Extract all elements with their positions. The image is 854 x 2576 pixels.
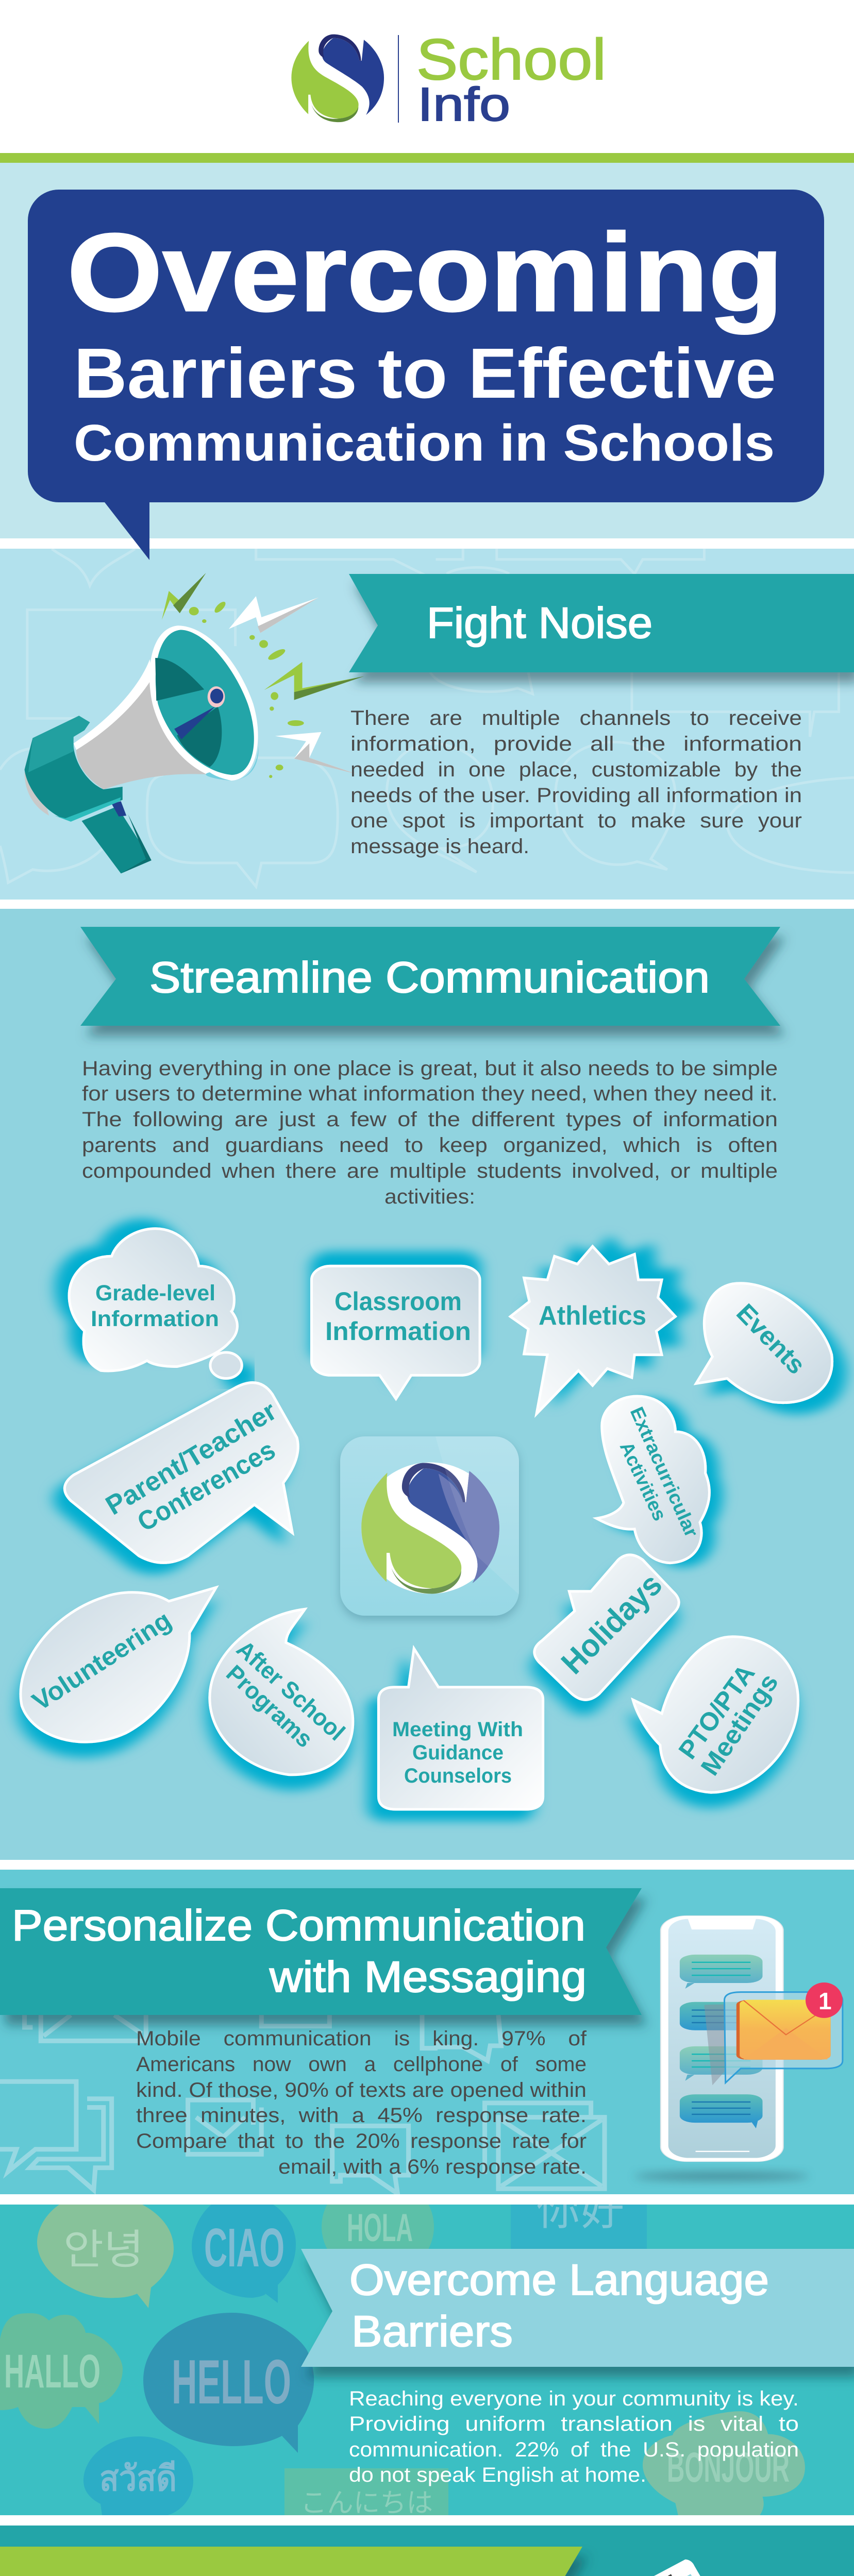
text: streamline body: The following are just a few of the different types of information bbox=[82, 1108, 778, 1131]
text: personalize body: Compare that to the 20% response rate for bbox=[136, 2130, 587, 2153]
logo wordmark: Info: Info bbox=[417, 78, 510, 131]
notification badge circle bbox=[806, 1982, 843, 2018]
panel: title background bbox=[0, 163, 854, 538]
bubble: Thai greeting: สวัสดี bbox=[99, 2459, 177, 2498]
chat bubble 1 bbox=[680, 1955, 763, 1989]
icon: app icon with S mark bbox=[340, 1436, 519, 1620]
bubble: Chinese greeting bbox=[511, 2205, 647, 2249]
bubble: Grade-level Information: Information bbox=[91, 1307, 219, 1331]
bubble: Parent/Teacher Conferences bbox=[64, 1383, 298, 1563]
bubble: Korean greeting bbox=[37, 2205, 174, 2308]
bubble: Grade-level Information: Grade-level bbox=[95, 1281, 215, 1306]
text: streamline body: compounded when there are multiple students involved, or multiple bbox=[82, 1160, 778, 1182]
bubble: Athletics bbox=[510, 1246, 675, 1414]
bubble: Extracurricular Activities bbox=[596, 1396, 709, 1563]
text: personalize body: email, with a 6% response rate. bbox=[278, 2156, 587, 2178]
logo wordmark: School: School bbox=[416, 27, 606, 92]
bubble: PTO/PTA Meetings: PTO/PTA bbox=[673, 1659, 761, 1764]
banner: Overcome Language Barriers bbox=[301, 2249, 854, 2367]
bubble: After School Programs: After School bbox=[231, 1635, 350, 1745]
text: fight noise body: information, provide all the information bbox=[350, 733, 802, 755]
megaphone rim bbox=[149, 625, 258, 781]
bubble: Volunteering: Volunteering bbox=[27, 1605, 176, 1716]
heading: Streamline Communication: Streamline Communication bbox=[149, 953, 710, 1002]
text: fight noise body: one spot is important to make sure your bbox=[350, 809, 802, 832]
panel: simplify administration bbox=[0, 2526, 854, 2576]
bubble: Grade-level Information bbox=[69, 1229, 242, 1379]
text: personalize body: kind. Of those, 90% of texts are opened within bbox=[136, 2079, 587, 2102]
bubble: Events bbox=[696, 1283, 832, 1403]
bubble: HELLO: HELLO bbox=[172, 2347, 291, 2417]
banner: Overcome Language Barriers: Barriers bbox=[351, 2307, 513, 2355]
text: streamline body bbox=[82, 1057, 778, 1208]
bubble: Meeting With Guidance Counselors: Guidance bbox=[412, 1741, 504, 1764]
bubble: HALLO: HALLO bbox=[4, 2345, 101, 2398]
bubble: Chinese greeting: 你好 bbox=[537, 2185, 624, 2234]
bubble: Holidays bbox=[534, 1555, 679, 1700]
text: personalize body: three minutes, with a 45% response rate. bbox=[136, 2104, 587, 2127]
bubble: Events: Events bbox=[731, 1298, 811, 1380]
bubble: Holidays: Holidays bbox=[555, 1567, 669, 1681]
text: streamline body: parents and guardians need to keep organized, which is often bbox=[82, 1134, 778, 1157]
greeting speech bubbles bbox=[0, 2175, 805, 2518]
panel: title callout bbox=[28, 190, 824, 560]
text: language body: do not speak English at home. bbox=[349, 2464, 646, 2486]
bubble: HOLA: HOLA bbox=[347, 2206, 413, 2250]
banner: Fight Noise bbox=[349, 574, 854, 672]
text: streamline body: Having everything in one place is great, but it also needs to be simple bbox=[82, 1057, 778, 1080]
text: language body: Reaching everyone in your community is key. bbox=[349, 2387, 799, 2410]
bubble: Parent/Teacher Conferences: Conferences bbox=[132, 1435, 280, 1537]
icon: hand holding smartphone bbox=[615, 2560, 854, 2576]
bubble: CIAO: CIAO bbox=[204, 2217, 284, 2278]
text: personalize body: Americans now own a cellphone of some bbox=[136, 2053, 587, 2076]
bubble: After School Programs bbox=[210, 1609, 353, 1775]
title line: Overcoming: Overcoming bbox=[67, 210, 783, 334]
bubble: BONJOUR bbox=[643, 2411, 805, 2515]
heading: Personalize Communication with Messaging: Personalize Communication bbox=[12, 1901, 585, 1950]
title line: Communication in Schools: Communication in Schools bbox=[74, 414, 775, 472]
chat bubble 2 bbox=[680, 2002, 763, 2030]
banner: Personalize Communication with Messaging bbox=[0, 1888, 642, 2015]
logo bbox=[291, 27, 606, 131]
bubble: Japanese greeting bbox=[284, 2468, 448, 2518]
bubble: PTO/PTA Meetings: Meetings bbox=[695, 1668, 784, 1781]
phone body bbox=[615, 2560, 755, 2576]
megaphone handle bbox=[82, 806, 152, 873]
megaphone cone bbox=[76, 659, 215, 789]
sound bolts and sparks bbox=[162, 573, 206, 620]
banner: Simplify Administration bbox=[0, 2547, 582, 2576]
text: fight noise body: needs of the user. Providing all information in bbox=[350, 784, 802, 807]
bubble: CIAO bbox=[192, 2205, 296, 2303]
bubble: Classroom Information: Classroom bbox=[334, 1287, 462, 1316]
text: personalize body bbox=[136, 2027, 587, 2178]
text: fight noise body: message is heard. bbox=[350, 835, 529, 858]
bubble: After School Programs: Programs bbox=[221, 1659, 318, 1753]
bubble: Korean greeting: 안녕 bbox=[63, 2227, 144, 2273]
title line: Barriers to Effective: Barriers to Effective bbox=[74, 334, 776, 413]
bubble: HOLA bbox=[322, 2205, 434, 2249]
green divider bar bbox=[0, 153, 854, 163]
banner: Personalize Communication with Messaging: with Messaging bbox=[269, 1953, 587, 2001]
bubble: Classroom Information bbox=[311, 1266, 480, 1399]
text: language body: Providing uniform translation is vital to bbox=[349, 2413, 799, 2435]
panel: fight noise bbox=[0, 541, 854, 900]
icon: School Info S mark bbox=[291, 34, 384, 122]
envelope on glass card bbox=[725, 1992, 843, 2083]
notification badge number: 1 bbox=[818, 1988, 832, 2014]
bubble: Meeting With Guidance Counselors bbox=[378, 1649, 543, 1809]
bubble: Volunteering bbox=[21, 1587, 216, 1742]
bubble: HELLO bbox=[143, 2313, 314, 2453]
bubble: PTO/PTA Meetings bbox=[633, 1637, 798, 1792]
bubble: Thai greeting bbox=[83, 2436, 193, 2515]
chat bubble 3 bbox=[680, 2046, 763, 2081]
bubble: Meeting With Guidance Counselors: Meeting With bbox=[392, 1718, 523, 1741]
text: fight noise body: needed in one place, customizable by the bbox=[350, 758, 802, 781]
bubble: Extracurricular Activities: Activities bbox=[616, 1438, 671, 1524]
heading: Fight Noise: Fight Noise bbox=[427, 599, 652, 647]
icon: megaphone bbox=[25, 573, 364, 873]
bubble: HALLO bbox=[0, 2313, 123, 2429]
text: language body: communication. 22% of the U.S. population bbox=[349, 2438, 799, 2461]
bubble: Japanese greeting: こんにちは bbox=[300, 2488, 433, 2518]
text: streamline body: activities: bbox=[384, 1185, 475, 1208]
text: streamline body: for users to determine what information they need, when they need it. bbox=[82, 1082, 778, 1105]
panel: overcome language barriers bbox=[0, 2175, 854, 2518]
text: personalize body: Mobile communication is king. 97% of bbox=[136, 2027, 587, 2050]
bubble: Extracurricular Activities: Extracurricular bbox=[626, 1404, 702, 1540]
chat bubble 4 bbox=[680, 2094, 763, 2128]
banner: Streamline Communication bbox=[80, 927, 780, 1026]
panel: streamline communication bbox=[0, 909, 854, 1860]
text: fight noise body bbox=[350, 707, 802, 858]
text: fight noise body: There are multiple channels to receive bbox=[350, 707, 802, 730]
bubble: Athletics: Athletics bbox=[539, 1301, 646, 1331]
icon: smartphone with messages and envelope bbox=[634, 1916, 843, 2180]
bubble: Meeting With Guidance Counselors: Counselors bbox=[404, 1765, 512, 1787]
heading: Overcome Language Barriers: Overcome Language bbox=[349, 2256, 769, 2304]
bubble: Parent/Teacher Conferences: Parent/Teacher bbox=[101, 1396, 282, 1521]
text: language body bbox=[349, 2387, 799, 2486]
panel: personalize communication bbox=[0, 1870, 854, 2194]
bubble: Classroom Information: Information bbox=[325, 1317, 471, 1346]
